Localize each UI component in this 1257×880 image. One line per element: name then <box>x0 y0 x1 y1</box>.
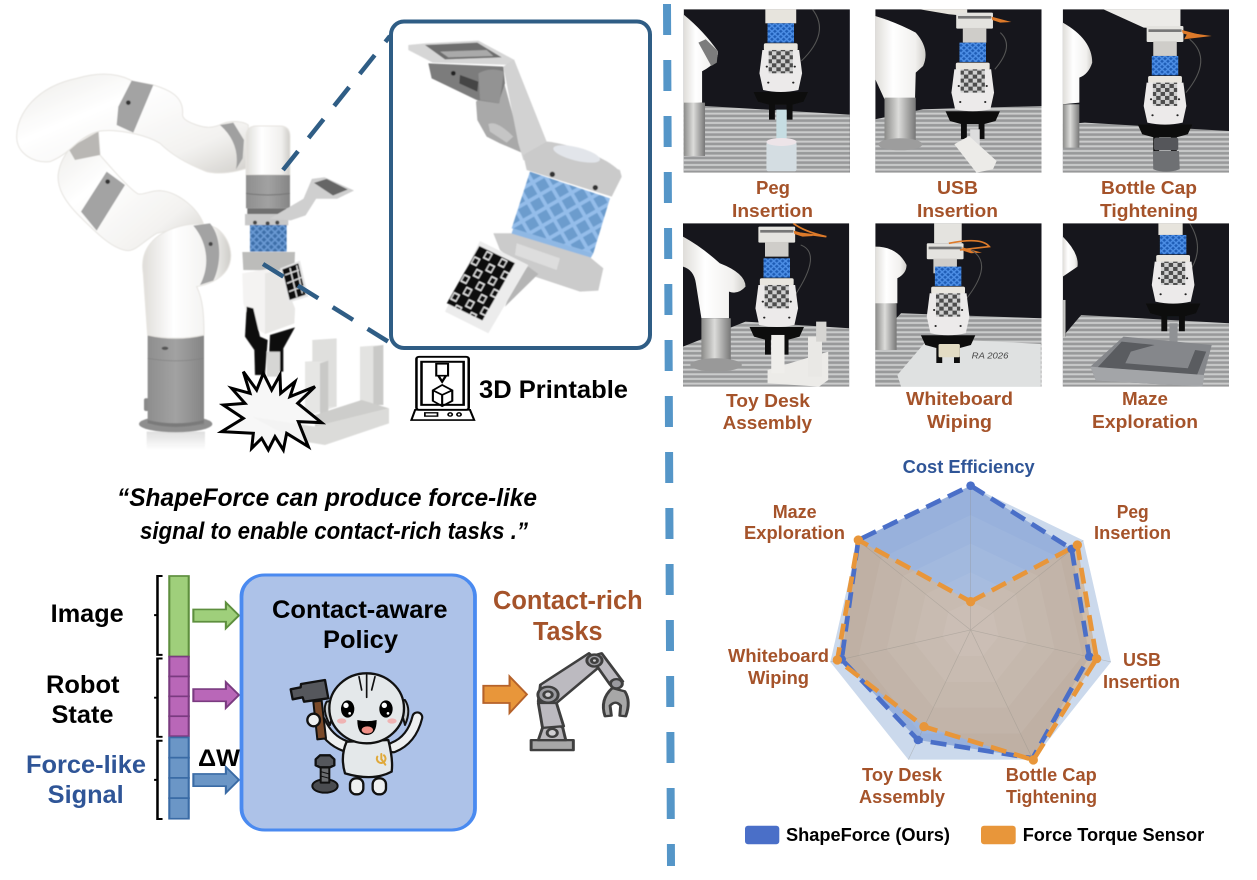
radar axis labels: Exploration <box>744 522 845 543</box>
panel: policy diagram <box>26 575 643 830</box>
panel: task photos <box>683 9 1229 433</box>
labels: task names: Assembly <box>723 412 813 433</box>
label: Contact-rich Tasks: Contact-rich <box>493 587 643 615</box>
callout: zoom lines and inset <box>263 22 650 348</box>
photo: peg insertion <box>684 9 850 173</box>
radar axis labels: Tightening <box>1006 786 1097 807</box>
radar axis labels: Peg <box>1117 501 1149 522</box>
photo: bottle cap tightening <box>1063 9 1229 173</box>
icon: 3D printer <box>411 357 474 420</box>
labels: task names: Toy Desk <box>726 390 811 411</box>
radar axis labels: Insertion <box>1103 671 1180 692</box>
labels: task names: Whiteboard <box>906 388 1013 409</box>
icon: impact star <box>222 372 322 450</box>
legend: Force Torque Sensor <box>1023 824 1204 845</box>
radar axis labels: Wiping <box>748 667 809 688</box>
photo: whiteboard wiping: RA 2026 <box>972 351 1009 361</box>
radar chart <box>830 481 1111 765</box>
labels: inputs: Robot <box>46 671 120 699</box>
radar axis labels: Assembly <box>859 786 946 807</box>
photo: USB insertion <box>875 9 1042 173</box>
dashed callout lines <box>263 36 392 344</box>
robot arm <box>17 74 290 450</box>
radar axis labels: Insertion <box>1094 522 1171 543</box>
labels: inputs: State <box>52 701 114 729</box>
inset box with gripper closeup <box>391 22 650 348</box>
labels: task names: Insertion <box>732 200 813 221</box>
labels: task names: USB <box>937 177 978 198</box>
legend <box>745 824 1204 845</box>
photo: whiteboard wiping <box>875 223 1042 387</box>
label: policy: Contact-aware <box>272 596 448 624</box>
labels: inputs: ΔW <box>198 745 240 772</box>
labels: task names: Bottle Cap <box>1101 177 1197 198</box>
icon: robot mascot with hammer and bolt <box>291 673 417 794</box>
label: policy <box>272 596 448 654</box>
labels: inputs: Force-like <box>26 751 146 779</box>
label: policy: Policy <box>323 626 398 654</box>
quote text <box>117 484 537 545</box>
label: Contact-rich Tasks <box>493 587 643 646</box>
quote text: “ShapeForce can produce force-like <box>117 484 537 512</box>
labels: task names: Peg <box>756 177 790 198</box>
labels: task names: Exploration <box>1092 411 1198 432</box>
radar axis labels: Whiteboard <box>728 645 829 666</box>
label: 3D Printable: 3D Printable <box>479 376 628 404</box>
labels: inputs <box>26 600 240 809</box>
quote text: signal to enable contact-rich tasks .” <box>140 518 528 545</box>
panel: robot arm hardware <box>17 74 389 450</box>
divider: dashed vertical line <box>667 4 671 866</box>
labels: task names: Maze <box>1122 388 1168 409</box>
radar axis labels: Bottle Cap <box>1006 764 1097 785</box>
radar axis labels: USB <box>1123 649 1161 670</box>
labels: task names: Tightening <box>1100 200 1198 221</box>
labels: task names <box>723 177 1198 433</box>
labels: inputs: Image <box>51 600 124 628</box>
photo: maze exploration <box>1063 223 1229 387</box>
labels: task names: Insertion <box>917 200 998 221</box>
labels: inputs: Signal <box>48 781 124 809</box>
labels: task names: Wiping <box>927 411 992 432</box>
gripper, tag and toy desk <box>242 252 389 445</box>
legend: ShapeForce (Ours) <box>786 824 950 845</box>
icon: industrial robot arm <box>531 653 628 750</box>
photo: toy desk assembly <box>683 223 849 387</box>
input token columns and brackets <box>154 575 527 830</box>
radar axis labels: Cost Efficiency <box>903 457 1035 477</box>
radar axis labels: Maze <box>773 501 817 522</box>
radar axis labels: Toy Desk <box>862 764 943 785</box>
radar axis labels <box>728 457 1180 807</box>
camera mount on wrist <box>270 177 354 220</box>
label: Contact-rich Tasks: Tasks <box>533 618 602 646</box>
